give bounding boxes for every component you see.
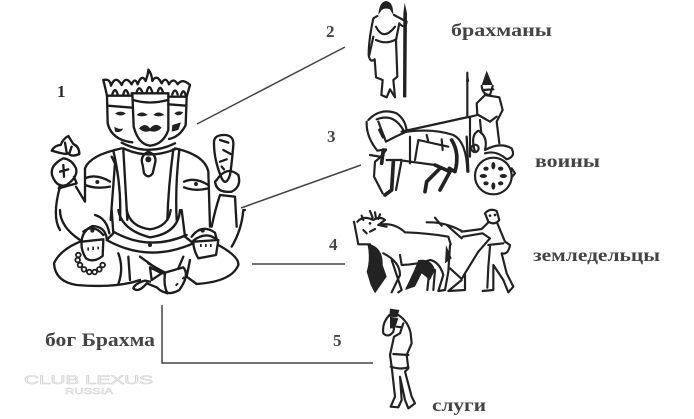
Brahma: lap, hands and crossed legs [54, 210, 245, 293]
figure: farmer ploughing with oxen [354, 210, 513, 293]
number 3: 3 [327, 127, 336, 146]
Brahma: heads and crowns [103, 70, 190, 146]
watermark: Club Lexus Russia: RUSSIA [65, 387, 114, 396]
warrior: horses [367, 111, 515, 195]
label: servants: слуги [432, 395, 486, 415]
number 1: 1 [57, 82, 66, 101]
figure: warrior on horse chariot [402, 71, 503, 157]
figure: brahmin [369, 1, 407, 97]
watermark: Club Lexus Russia [24, 373, 153, 396]
label: warriors: воины [535, 151, 600, 171]
figure: god Brahma [52, 70, 245, 293]
watermark: Club Lexus Russia: CLUB LEXUS [24, 373, 153, 387]
Brahma: torso and raised arms [52, 135, 239, 230]
label: brahmins: брахманы [451, 20, 552, 40]
number 4: 4 [329, 235, 338, 254]
label: farmers: земледельцы [533, 245, 660, 265]
number 2: 2 [326, 22, 334, 41]
figure: servant carrying a vessel [383, 309, 415, 408]
connector lines from Brahma to the castes [162, 47, 373, 363]
number 5: 5 [333, 331, 342, 350]
label: god Brahma: бог Брахма [45, 330, 156, 351]
